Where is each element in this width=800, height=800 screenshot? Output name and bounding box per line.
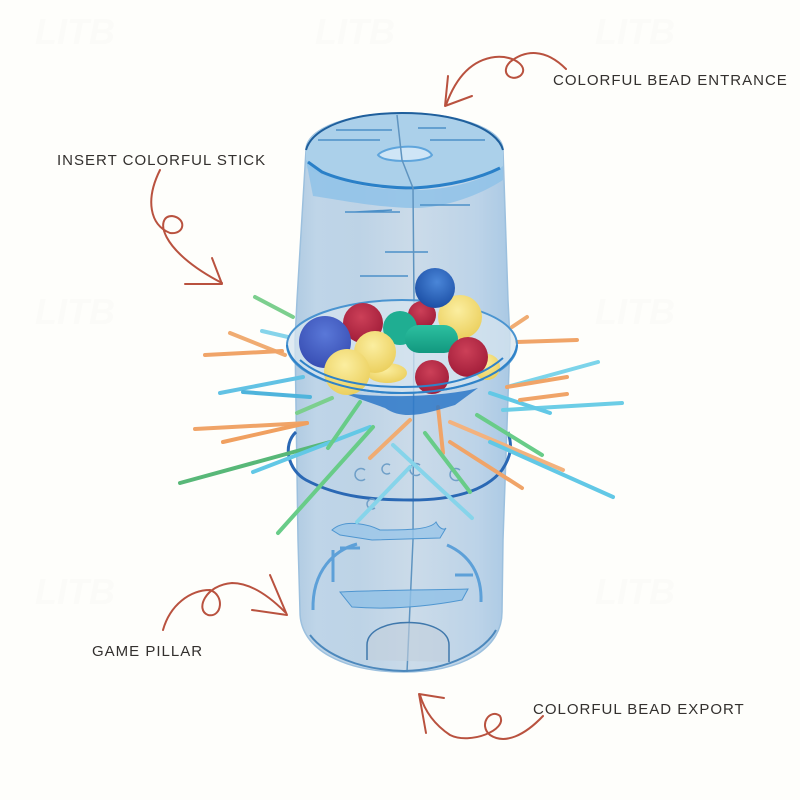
upper lower-section details bbox=[332, 522, 446, 540]
top ledge dark edge bbox=[308, 162, 500, 188]
under-chamber dark patch bbox=[340, 388, 478, 415]
colored sticks bbox=[180, 297, 622, 533]
top hole bbox=[378, 147, 432, 161]
faint watermark bbox=[35, 11, 675, 612]
bead chamber bbox=[287, 300, 517, 415]
game pillar bbox=[288, 113, 510, 672]
pillar body bbox=[295, 113, 510, 672]
arrow: game pillar bbox=[163, 575, 287, 630]
lower collar arc bbox=[288, 432, 510, 500]
faint watermark: LITB bbox=[595, 11, 675, 52]
faint watermark: LITB bbox=[595, 291, 675, 332]
lower left handle bbox=[313, 544, 360, 610]
top detail lines bbox=[318, 128, 485, 276]
chamber front rim bbox=[287, 345, 517, 393]
label: colorful bead export: COLORFUL BEAD EXPORT bbox=[533, 701, 745, 718]
faint watermark: LITB bbox=[35, 291, 115, 332]
bottom shadow bbox=[310, 630, 496, 671]
faint watermark: LITB bbox=[595, 571, 675, 612]
seam bbox=[397, 115, 414, 672]
chamber glass bbox=[287, 300, 517, 393]
collar dots bbox=[355, 463, 460, 509]
lower right handle bbox=[447, 545, 481, 602]
top rim outline bbox=[306, 113, 503, 150]
arrow: bead export bbox=[419, 694, 543, 739]
faint watermark: LITB bbox=[315, 11, 395, 52]
lower band bbox=[340, 589, 468, 608]
label: game pillar: GAME PILLAR bbox=[92, 643, 203, 660]
label: colorful bead entrance: COLORFUL BEAD ENTRANCE bbox=[553, 72, 788, 89]
faint watermark: LITB bbox=[35, 11, 115, 52]
top ledge band bbox=[306, 160, 503, 208]
colorful beads bbox=[299, 268, 500, 395]
top cap bbox=[306, 113, 503, 188]
label: insert colorful stick: INSERT COLORFUL STICK bbox=[57, 152, 266, 169]
faint watermark: LITB bbox=[35, 571, 115, 612]
bottom arch bbox=[367, 622, 449, 662]
arrow: insert stick bbox=[151, 170, 222, 284]
arrow: bead entrance bbox=[445, 53, 566, 106]
